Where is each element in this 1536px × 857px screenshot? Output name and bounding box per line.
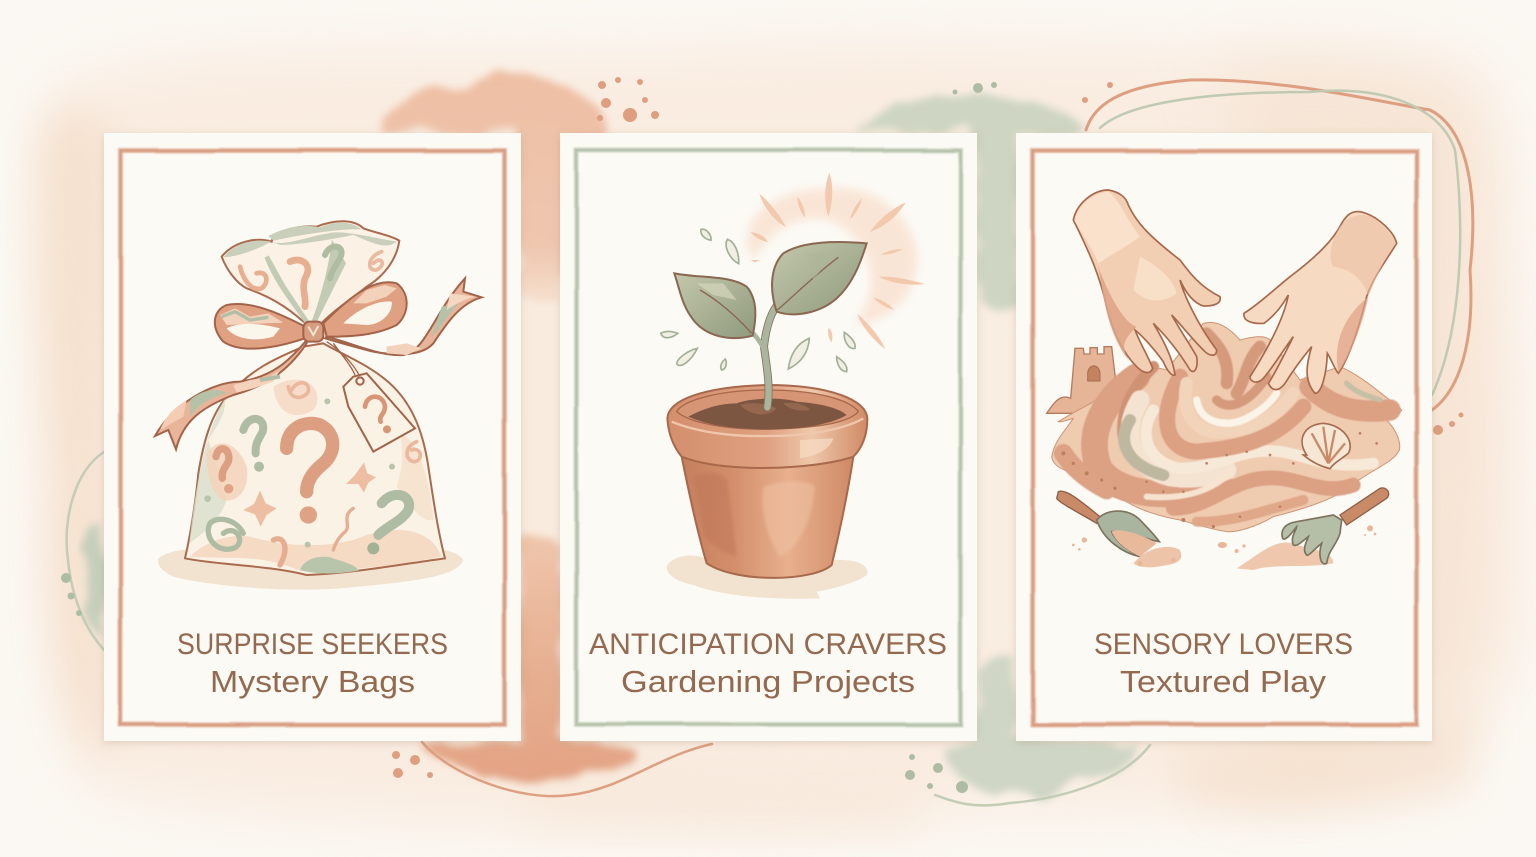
decorative curved lines (67, 80, 1473, 805)
panel: sensory lovers (1016, 133, 1432, 741)
card frame: terracotta (1032, 150, 1416, 724)
pot body (682, 457, 853, 578)
left hand (1073, 190, 1220, 375)
card frame: terracotta (120, 150, 504, 724)
seashell (1302, 423, 1350, 469)
sun glow (747, 173, 925, 349)
blob: sage bottom (940, 655, 1140, 793)
right leaf (772, 242, 867, 314)
subheading: textured play: Textured Play (1120, 664, 1327, 699)
blob: terracotta bottom (420, 538, 630, 780)
subheading: mystery bags: Mystery Bags (210, 664, 415, 699)
toy rake (1340, 488, 1389, 525)
stem (764, 302, 780, 407)
panel: anticipation cravers (560, 133, 977, 741)
falling petals (661, 229, 855, 372)
icon: potted seedling (661, 173, 925, 599)
blob: sage left (82, 530, 106, 640)
heading: surprise seekers: SURPRISE SEEKERS (177, 628, 448, 661)
ground shadow (667, 556, 867, 599)
icon: hands in textured sand (1047, 190, 1402, 570)
bag pattern (208, 383, 420, 565)
card frame: sage (576, 150, 960, 724)
bow and ribbons (215, 304, 308, 349)
panel: surprise seekers (104, 133, 521, 741)
icon: gift tag (343, 373, 415, 452)
blob: terracotta top (382, 74, 604, 300)
sand mound (1052, 322, 1402, 532)
heading: sensory lovers: SENSORY LOVERS (1094, 628, 1353, 661)
decorative dots (61, 77, 1464, 793)
left leaf (674, 273, 755, 338)
heading: anticipation cravers: ANTICIPATION CRAVERS (589, 628, 947, 661)
subheading: gardening projects: Gardening Projects (621, 664, 915, 699)
lower gap pale washes (522, 300, 560, 540)
sand castle (1047, 347, 1133, 413)
pot rim (667, 385, 867, 468)
toy scoop (1057, 491, 1100, 523)
blob: sage top (852, 94, 1088, 307)
right hand (1244, 212, 1397, 393)
top ruffle (222, 221, 399, 325)
icon: mystery bag (155, 221, 482, 590)
